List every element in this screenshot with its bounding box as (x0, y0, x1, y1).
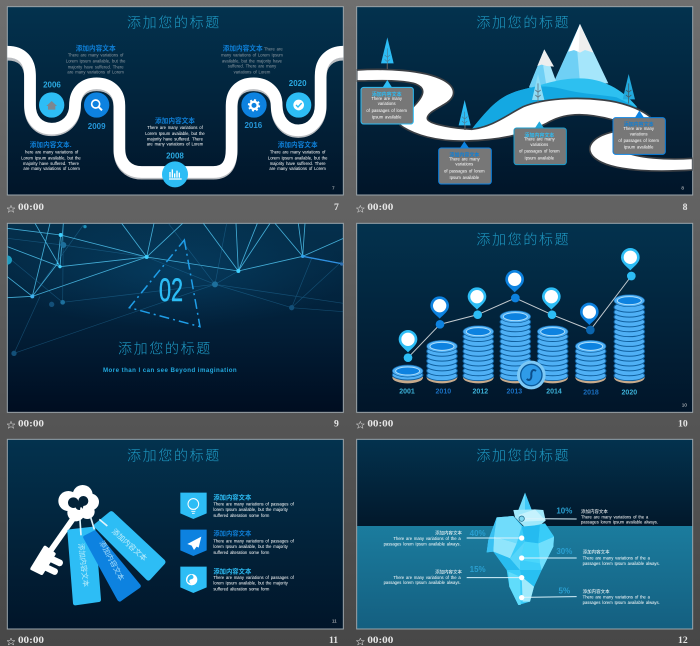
coin stacks (392, 295, 645, 383)
slide number: 10 (682, 402, 687, 407)
callout 4 (613, 111, 665, 154)
callout 2: of passages of lorem (444, 168, 485, 173)
callout 1: Ipsum available (372, 115, 402, 120)
text block bottom right: are many variations of Lorem (269, 166, 326, 171)
label 15%: passages lorem Ipsum available always. (384, 580, 461, 585)
footer time (356, 635, 394, 646)
callout 4: Ipsum available (624, 145, 654, 150)
slide 12 title: 添加您的标题 (476, 446, 570, 466)
slide 12 sky (357, 439, 693, 526)
callout 2: Ipsum available (450, 175, 480, 180)
text block bottom right: majority have suffered. There (270, 161, 326, 166)
slide 7 background (7, 7, 343, 195)
footer time (356, 418, 394, 429)
footer number: 7 (334, 202, 339, 213)
text block center: Lorem Ipsum available, but the (145, 131, 205, 136)
text block bottom right (268, 140, 328, 171)
slide 7: winding timeline (7, 7, 343, 213)
node 2016 gear icon (241, 92, 267, 118)
percentages: 15% (470, 565, 486, 574)
node 2006 home icon (39, 92, 64, 118)
label 15% (384, 569, 462, 585)
leader nodes (519, 516, 524, 600)
slide 10 background (357, 223, 693, 412)
year labels (43, 79, 307, 161)
label 10%: 添加内容文本 (581, 508, 608, 515)
tag 2: 添加内容文本 (98, 539, 126, 583)
center badge icon (517, 361, 546, 389)
text block bottom right: Lorem Ipsum available, but the (268, 155, 328, 160)
label 5%: There are many variations of the a (583, 595, 651, 600)
callout 4: variations (630, 131, 648, 136)
tag 3 (94, 511, 165, 581)
label 10%: There are many variations of the a (581, 514, 649, 519)
footer time: 00:00 (367, 635, 394, 646)
slide number: 8 (681, 186, 684, 191)
callout 3: Ipsum available (525, 155, 555, 160)
text block top right (221, 43, 283, 74)
label 10%: passages lorem Ipsum available always. (581, 520, 658, 525)
percentages: 30% (556, 547, 572, 556)
percentages: 5% (559, 587, 570, 596)
label 5%: passages lorem Ipsum available always. (583, 600, 660, 605)
text block top right: There are (264, 47, 283, 52)
text block 1: lorem Ipsum available, but the majority (213, 507, 289, 512)
footer time (356, 202, 394, 213)
label 30%: There are many variations of the a (583, 556, 651, 561)
slide 8 background (357, 7, 693, 195)
text block 3: lorem Ipsum available, but the majority (213, 580, 289, 585)
text block bottom left: majority have suffered. There (23, 161, 80, 166)
text block 3: 添加内容文本 (213, 566, 252, 575)
text block top left (66, 43, 126, 74)
footer time: 00:00 (367, 418, 394, 429)
callout 3: 添加内容文本 (524, 132, 554, 139)
footer time: 00:00 (18, 202, 44, 213)
text block 2: There are many variations of passages of (213, 538, 295, 543)
year axis labels: 2014 (546, 389, 562, 396)
text block center: majority have suffered. There (147, 136, 204, 141)
percentages: 40% (470, 529, 486, 538)
text block 2: suffered alteration some form (213, 550, 270, 555)
plane badge (180, 530, 207, 556)
footer number: 9 (334, 418, 339, 429)
text block top left: majority have suffered. There (68, 64, 124, 69)
text block 1: 添加内容文本 (213, 492, 252, 501)
year labels: 2008 (166, 152, 184, 161)
text block bottom right: There are many variations of (270, 149, 326, 154)
percentages (470, 507, 572, 596)
text block 3 (213, 566, 295, 591)
text block top left: are many variations of Lorem (67, 69, 124, 74)
footer number: 12 (678, 635, 688, 646)
node 2008 chart icon (162, 161, 188, 187)
year labels: 2009 (88, 122, 106, 131)
stack 2001 (392, 365, 423, 383)
label 15%: 添加内容文本 (435, 569, 462, 576)
node 2009 search icon (84, 92, 109, 118)
year axis labels: 2012 (473, 389, 488, 396)
subtitle: More than I can see Beyond imagination (103, 367, 237, 374)
footer time: 00:00 (367, 202, 394, 213)
slide 9 background (7, 223, 343, 412)
callout 1 (361, 80, 413, 124)
text block 2 (213, 528, 295, 555)
footer time (7, 202, 44, 213)
footer number: 10 (678, 418, 688, 429)
text block top right: variations of Lorem (234, 69, 271, 74)
tag 1: 添加内容文本 (76, 543, 91, 588)
slide 11 title: 添加您的标题 (127, 446, 221, 466)
year axis labels (399, 389, 637, 396)
year labels: 2020 (289, 79, 307, 88)
stack 2013 (500, 311, 531, 383)
bulb badge (180, 493, 207, 519)
footer time (7, 418, 44, 429)
text block top right: 添加内容文本 (223, 43, 263, 52)
text block top left: Lorem Ipsum available, but the (66, 59, 126, 64)
percentages: 10% (556, 507, 572, 516)
text block center: There are many variations of (147, 125, 204, 130)
slide 12: iceberg (356, 439, 693, 646)
year labels: 2006 (43, 81, 61, 90)
winding road (357, 69, 693, 171)
trend line (408, 276, 631, 358)
slide 11: keys and tags (7, 439, 343, 646)
network graphic (0, 215, 347, 356)
stack 2012 (463, 326, 494, 383)
slide number: 11 (332, 619, 337, 624)
map pins (399, 248, 640, 352)
slide number: 7 (332, 186, 335, 191)
slide 9: section divider (0, 215, 347, 429)
footer number: 8 (683, 202, 688, 213)
text block bottom left (21, 140, 81, 171)
text block top right: many variations of Lorem Ipsum (221, 53, 283, 58)
key (32, 485, 99, 576)
text block center: 添加内容文本 (155, 116, 195, 125)
callout 2 (439, 141, 491, 184)
text block 1: suffered alteration some form (213, 513, 270, 518)
text block bottom right: 添加内容文本 (278, 140, 318, 149)
slide 8: road and mountains (356, 7, 693, 213)
footer time (7, 635, 44, 646)
callout 1: of passages of lorem (366, 108, 407, 113)
footer time: 00:00 (18, 418, 44, 429)
year axis labels: 2020 (622, 389, 637, 396)
text block top left: There are many variations of (68, 53, 124, 58)
globe badge (180, 567, 207, 593)
label 30% (583, 549, 660, 566)
text block center (145, 116, 205, 147)
callout 4: There are many (623, 126, 655, 131)
tag 2 (83, 530, 141, 602)
label 15%: There are many variations of the a (393, 575, 461, 580)
callout 3: variations (530, 142, 548, 147)
callout 3: of passages of lorem (519, 149, 560, 154)
callout 4: of passages of lorem (618, 138, 659, 143)
text block 3: There are many variations of passages of (213, 575, 295, 580)
label 40%: 添加内容文本 (435, 529, 462, 536)
label 30%: 添加内容文本 (583, 549, 610, 556)
text block bottom left: Lorem Ipsum available, but the (21, 155, 81, 160)
year axis labels: 2001 (399, 389, 415, 396)
tag 3: 添加内容文本 (110, 527, 149, 563)
big mountain (553, 24, 608, 83)
callout 1: variations (378, 101, 396, 106)
text block 2: 添加内容文本 (213, 528, 252, 537)
label 5%: 添加内容文本 (583, 588, 610, 595)
callout 3 (514, 121, 566, 165)
dashed triangle (129, 240, 200, 327)
road shadow (7, 55, 343, 174)
slide 8 title: 添加您的标题 (476, 13, 570, 33)
callout 3: There are many (524, 137, 556, 142)
text block 2: lorem Ipsum available, but the majority (213, 544, 289, 549)
year labels: 2016 (244, 121, 263, 130)
slide 7 title: 添加您的标题 (127, 13, 221, 33)
text block bottom left: here are many variations of (25, 149, 79, 154)
text block 1: There are many variations of passages of (213, 502, 295, 507)
text block 1 (213, 492, 295, 518)
tag 1 (67, 527, 101, 605)
label 40%: passages lorem Ipsum available always. (384, 542, 461, 547)
text block top right: available, but the majority have (222, 59, 283, 64)
section number: 02 (159, 272, 183, 308)
year axis labels: 2018 (583, 389, 599, 396)
small mountain (529, 49, 558, 87)
label 40%: There are many variations of the a (393, 536, 461, 541)
trees (381, 37, 635, 130)
slide 12 frame (357, 439, 693, 629)
text block top left: 添加内容文本 (76, 43, 116, 52)
data dots (404, 272, 636, 362)
label 10% (581, 508, 658, 525)
year axis labels: 2013 (507, 389, 522, 396)
callout 1: There are many (371, 96, 403, 101)
footer time: 00:00 (18, 635, 44, 646)
slide 9 title: 添加您的标题 (118, 338, 212, 358)
key ring strings (80, 517, 107, 535)
node 2020 check icon (286, 92, 311, 118)
label 5% (583, 588, 660, 605)
road (7, 52, 343, 172)
text block 3: suffered alteration some form (213, 586, 270, 591)
slide 10: coin stack chart (356, 223, 693, 429)
callout 2: There are many (449, 157, 481, 162)
stack 2018 (575, 340, 606, 383)
label 30%: passages lorem Ipsum available always. (583, 561, 660, 566)
stack 2020 (614, 295, 645, 383)
year axis labels: 2010 (436, 389, 451, 396)
slide 12 water (357, 526, 693, 629)
callout 1: 添加内容文本 (372, 91, 402, 98)
callout 4: 添加内容文本 (624, 121, 654, 128)
callout 2: variations (455, 162, 473, 167)
stack 2010 (427, 340, 457, 383)
text block bottom left: 添加内容文本. (30, 140, 72, 149)
leader lines (467, 519, 577, 597)
slide 11 background (7, 439, 343, 629)
iceberg (487, 493, 554, 605)
text block top right: suffered. There are many (228, 64, 277, 69)
hills (472, 78, 637, 130)
callout 2: 添加内容文本 (449, 152, 479, 159)
label 40% (384, 529, 462, 547)
text block center: are many variations of Lorem (147, 142, 204, 147)
footer number: 11 (329, 635, 338, 646)
text block bottom left: are many variations of Lorem (23, 166, 80, 171)
stack 2014 (537, 326, 568, 383)
slide 10 title: 添加您的标题 (476, 229, 570, 249)
